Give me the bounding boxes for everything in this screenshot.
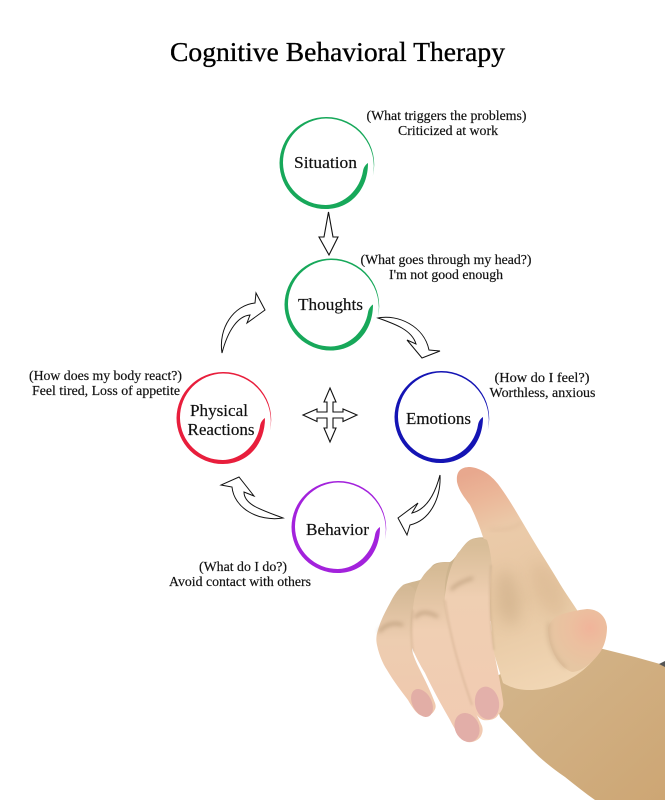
sleeve edge bbox=[659, 661, 665, 667]
node: Behavior: Behavior bbox=[306, 520, 370, 539]
node: Physical Reactions bbox=[176, 372, 271, 464]
node: Physical Reactions: Reactions bbox=[188, 420, 254, 439]
node: Behavior bbox=[292, 481, 386, 573]
arrow: Behavior to Physical Reactions bbox=[221, 477, 283, 519]
caption: Situation: Criticized at work bbox=[398, 123, 498, 138]
caption: Physical Reactions: Feel tired, Loss of appetite bbox=[32, 383, 180, 398]
node: Situation: Situation bbox=[294, 153, 357, 172]
caption: Situation: (What triggers the problems) bbox=[366, 108, 526, 123]
caption: Thoughts: (What goes through my head?) bbox=[360, 252, 532, 267]
node: Thoughts: Thoughts bbox=[298, 295, 363, 314]
icon: four-way arrow bbox=[303, 388, 357, 442]
shading: finger separators bbox=[412, 565, 494, 705]
caption: Thoughts bbox=[360, 252, 532, 282]
arrow: Emotions to Behavior bbox=[398, 475, 440, 535]
caption: Behavior: (What do I do?) bbox=[199, 559, 287, 574]
finger: little bbox=[376, 585, 436, 716]
arrow: Thoughts to Emotions bbox=[378, 317, 440, 358]
arrow: Situation to Thoughts bbox=[319, 212, 338, 255]
node: Thoughts bbox=[284, 258, 379, 351]
shading: palm hollow bbox=[496, 572, 560, 622]
caption: Emotions: Worthless, anxious bbox=[490, 385, 596, 400]
shading: knuckle creases bbox=[379, 578, 473, 632]
node: Situation bbox=[280, 117, 374, 209]
palm and index finger bbox=[457, 467, 600, 690]
finger: ring bbox=[412, 562, 483, 742]
title: Cognitive Behavioral Therapy bbox=[170, 36, 505, 67]
nail: middle finger bbox=[472, 685, 502, 721]
shading: thumb base bbox=[548, 622, 566, 668]
finger: middle bbox=[445, 538, 503, 720]
caption: Emotions bbox=[490, 370, 596, 400]
nail: little finger bbox=[407, 685, 437, 721]
nail: ring finger bbox=[450, 709, 484, 746]
caption: Emotions: (How do I feel?) bbox=[494, 370, 590, 385]
caption: Thoughts: I'm not good enough bbox=[389, 267, 503, 282]
caption: Behavior: Avoid contact with others bbox=[169, 574, 311, 589]
caption: Physical Reactions bbox=[29, 368, 182, 398]
arrow: Physical Reactions to Thoughts bbox=[221, 293, 265, 353]
node: Emotions: Emotions bbox=[406, 409, 471, 428]
caption: Situation bbox=[366, 108, 526, 138]
node: Physical Reactions: Physical bbox=[190, 401, 248, 420]
image: pointing hand bbox=[376, 467, 665, 800]
node: Emotions bbox=[394, 371, 489, 463]
caption: Behavior bbox=[169, 559, 311, 589]
thumb bbox=[548, 609, 607, 672]
caption: Physical Reactions: (How does my body react?) bbox=[29, 368, 182, 383]
forearm bbox=[490, 640, 665, 800]
back of hand bbox=[403, 537, 495, 640]
